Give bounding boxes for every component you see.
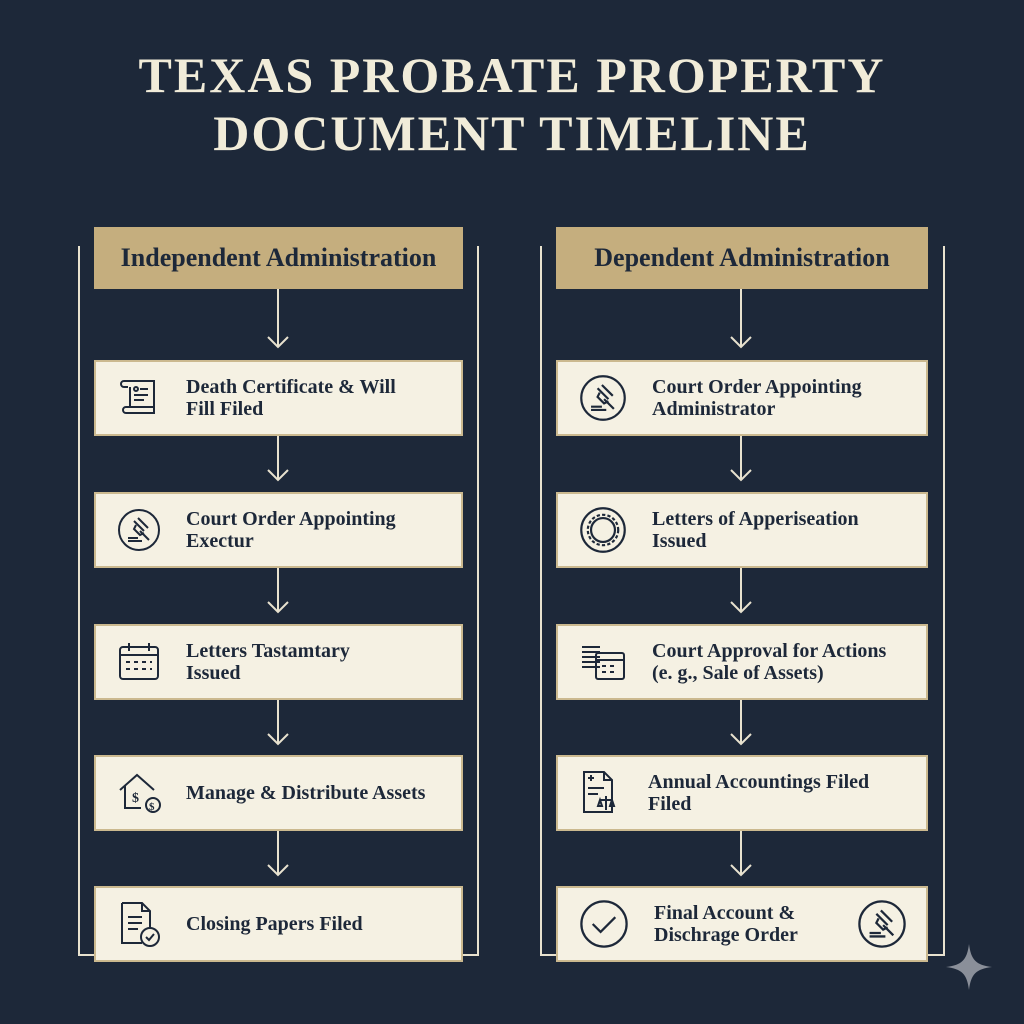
step: letters testamentary: Letters Tastamtary xyxy=(186,640,350,662)
step: letters of appraisement xyxy=(556,492,928,568)
step: letters testamentary: Issued xyxy=(186,662,240,684)
step: court order executor xyxy=(94,492,463,568)
step: manage assets: $ xyxy=(149,801,155,813)
bracket lines xyxy=(78,246,479,956)
step: court approval xyxy=(556,624,928,700)
header: dependent: Dependent Administration xyxy=(594,243,890,272)
step: final account xyxy=(556,886,928,962)
bracket lines xyxy=(540,246,945,956)
step: final account: Final Account & xyxy=(654,902,795,924)
step: court order administrator: Administrator xyxy=(652,398,775,420)
step: manage assets xyxy=(94,755,463,831)
header: independent xyxy=(94,227,463,289)
panel: independent administration xyxy=(78,227,479,962)
step: court order executor: Court Order Appointing xyxy=(186,508,396,530)
step: annual accountings: Filed xyxy=(648,793,691,815)
step: letters of appraisement: Letters of Apperiseation xyxy=(652,508,859,530)
step: final account: Dischrage Order xyxy=(654,924,798,946)
step: court order administrator xyxy=(556,360,928,436)
arrows xyxy=(267,289,289,876)
step: annual accountings xyxy=(556,755,928,831)
title xyxy=(139,47,885,161)
panel: dependent administration xyxy=(540,227,945,962)
title: DOCUMENT TIMELINE xyxy=(213,105,811,161)
step: death certificate: Fill Filed xyxy=(186,398,263,420)
step: court approval: Court Approval for Actions xyxy=(652,640,886,662)
step: death certificate: Death Certificate & Will xyxy=(186,376,396,398)
icon: sparkle xyxy=(946,944,992,990)
step: manage assets: Manage & Distribute Assets xyxy=(186,782,425,804)
title: TEXAS PROBATE PROPERTY xyxy=(139,47,885,103)
step: court order executor: Exectur xyxy=(186,530,254,552)
header: independent: Independent Administration xyxy=(121,243,436,272)
step: court order administrator: Court Order Appointing xyxy=(652,376,862,398)
step: closing papers: Closing Papers Filed xyxy=(186,913,363,935)
step: annual accountings: Annual Accountings Filed xyxy=(648,771,869,793)
step: closing papers xyxy=(94,886,463,962)
header: dependent xyxy=(556,227,928,289)
arrows xyxy=(730,289,752,876)
step: death certificate xyxy=(94,360,463,436)
step: letters testamentary xyxy=(94,624,463,700)
step: court approval: (e. g., Sale of Assets) xyxy=(652,662,824,684)
step: letters of appraisement: Issued xyxy=(652,530,706,552)
step: manage assets: $ xyxy=(132,791,139,806)
